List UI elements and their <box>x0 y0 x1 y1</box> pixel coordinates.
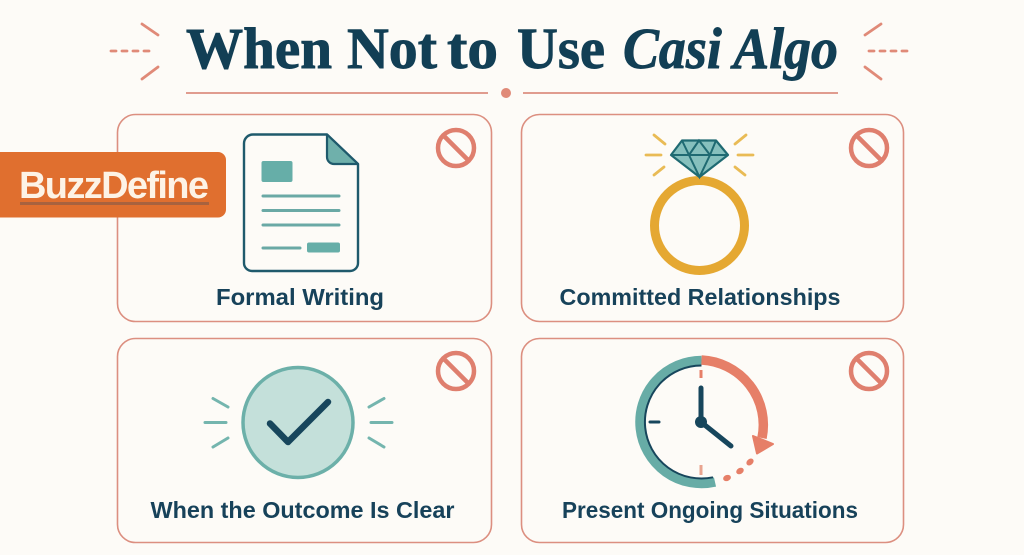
title underline <box>186 88 838 98</box>
icon: prohibited sign <box>438 353 474 389</box>
panel: present ongoing situations <box>522 338 904 542</box>
left title accent <box>111 24 158 79</box>
icon: diamond ring <box>646 135 753 270</box>
title <box>186 16 838 81</box>
label: Committed Relationships <box>560 284 840 310</box>
icon: check mark circle <box>205 368 392 478</box>
icon: prohibited sign <box>851 130 887 166</box>
label: Present Ongoing Situations <box>562 497 858 523</box>
icon: clock <box>640 360 773 484</box>
label: Formal Writing <box>216 284 384 310</box>
title: When <box>186 16 332 81</box>
icon: prohibited sign <box>851 353 887 389</box>
title: Casi Algo <box>623 16 838 81</box>
panel: formal writing <box>118 114 492 322</box>
title: Not <box>347 16 438 81</box>
label: When the Outcome Is Clear <box>150 497 455 523</box>
title: to <box>447 16 498 81</box>
icon: document <box>244 134 358 271</box>
panel: when the outcome is clear <box>118 338 492 542</box>
right title accent <box>865 24 913 79</box>
title: Use <box>517 16 605 81</box>
watermark text: BuzzDefine <box>19 165 209 207</box>
watermark underline <box>20 202 209 205</box>
watermark badge <box>0 152 226 218</box>
panel: committed relationships <box>522 114 904 322</box>
icon: prohibited sign <box>438 130 474 166</box>
